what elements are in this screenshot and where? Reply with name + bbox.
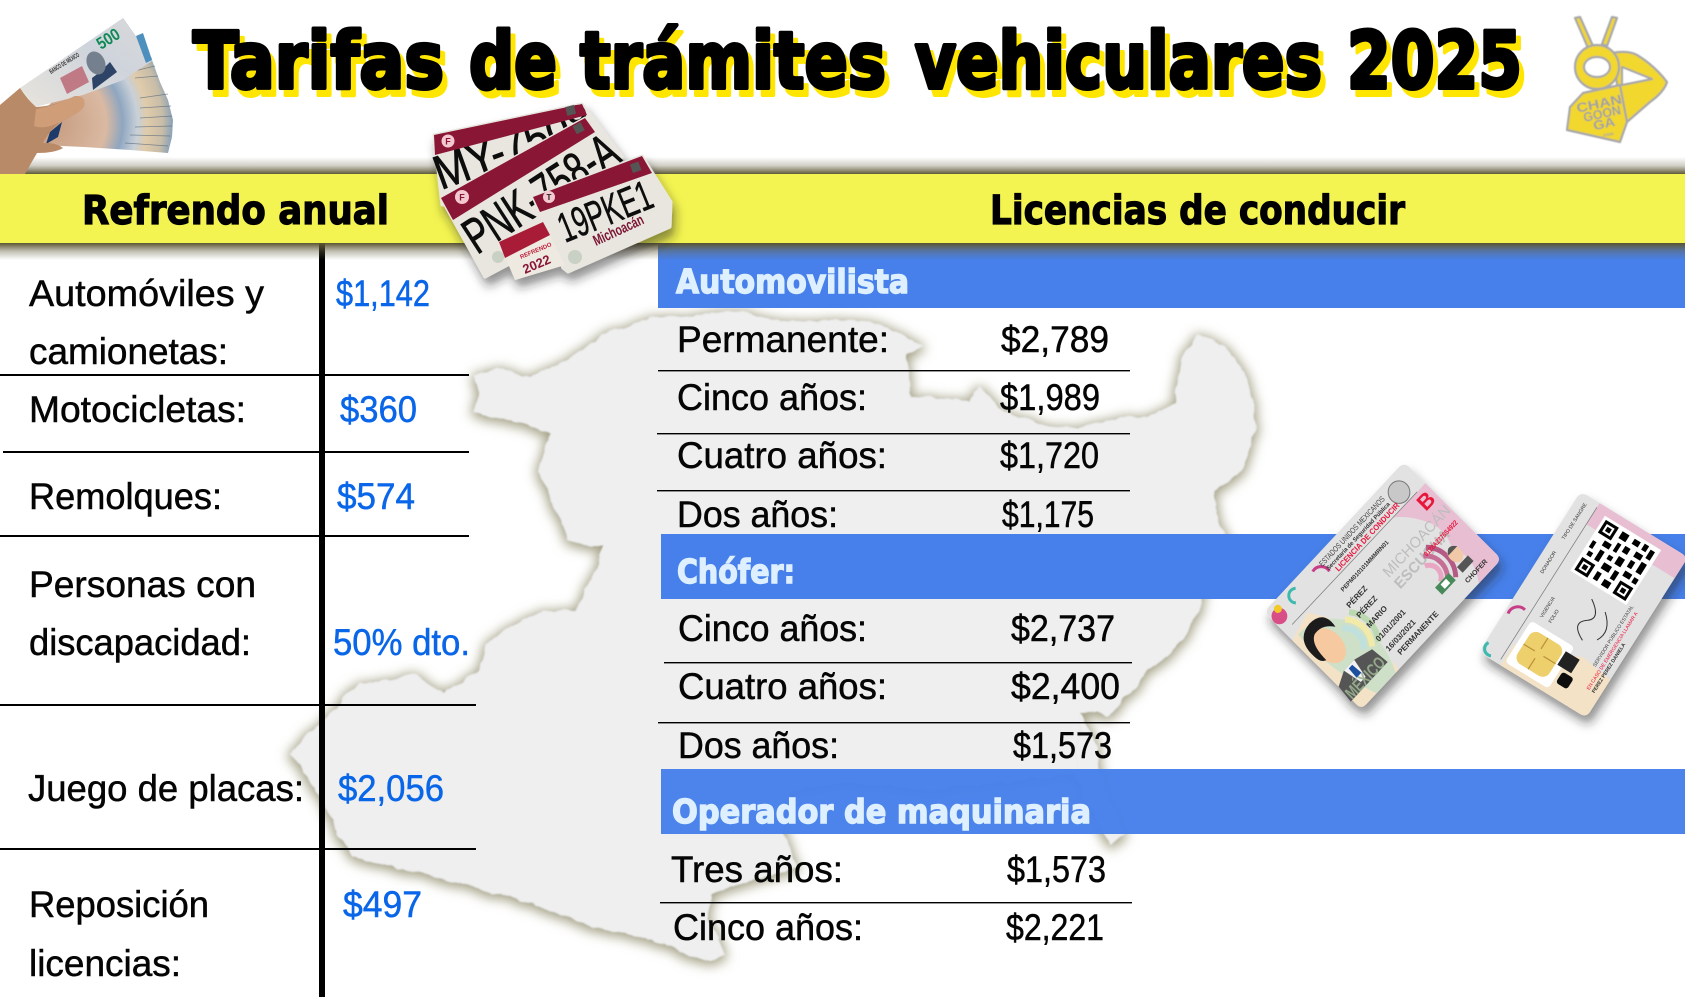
title xyxy=(193,17,1527,114)
title: vehiculares xyxy=(915,17,1322,107)
title: trámites xyxy=(585,24,891,114)
row: automóviles y camionetas xyxy=(29,272,430,372)
band: chófer: Chófer: xyxy=(677,552,795,591)
icon: driver licence back: PEREZ PEREZ DANIELA xyxy=(1591,642,1627,694)
row: cuatro años: $1,720 xyxy=(1000,434,1099,476)
row: reposición licencias: licencias: xyxy=(29,942,181,984)
icon: hand holding banknotes: 500 xyxy=(93,25,123,53)
title: de xyxy=(474,24,562,114)
row: dos años: Dos años: xyxy=(677,493,838,535)
header bar xyxy=(0,157,1685,260)
icon: driver licence front: 0128A2376S4922 xyxy=(1423,519,1460,558)
row: personas con discapacidad xyxy=(29,563,470,663)
smart chip xyxy=(1505,621,1574,689)
row: cinco años xyxy=(678,607,1115,649)
band: automovilista: Automovilista xyxy=(676,262,909,301)
title: 2025 xyxy=(1347,17,1522,107)
plate: PNK-758-A xyxy=(441,118,640,277)
icon: driver licence front: LICENCIA DE CONDUCIR xyxy=(1334,501,1402,573)
icon: driver licence back: SERVIDOR PÚBLICO ESTATAL xyxy=(1591,604,1636,668)
row: reposición licencias: $497 xyxy=(343,883,422,925)
sticker: refrendo 2022: REFRENDO xyxy=(519,242,553,261)
icon: driver licence front xyxy=(1263,462,1501,711)
sticker: refrendo 2022 xyxy=(499,222,565,280)
icon: driver licence front: MICHOACÁN xyxy=(1380,502,1454,581)
panel: automovilista xyxy=(657,243,1685,535)
row: cinco años: Cinco años: xyxy=(673,906,863,948)
row: motocicletas: $360 xyxy=(340,388,417,430)
row: dos años: $1,175 xyxy=(1002,493,1094,535)
background map of Michoacán xyxy=(289,312,1256,962)
row: automóviles y camionetas: $1,142 xyxy=(336,272,430,314)
panel: refrendo anual table xyxy=(0,243,476,997)
row: remolques: $574 xyxy=(337,475,415,517)
row: cuatro años: Cuatro años: xyxy=(677,434,887,476)
row: cinco años xyxy=(673,906,1104,948)
icon: changoonga logo: CHAN xyxy=(1575,91,1623,116)
icon: driver licence back: TIPO DE SANGRE xyxy=(1561,502,1589,541)
icon: driver licence front: PÉREZ xyxy=(1355,594,1379,620)
icon: changoonga logo: GA xyxy=(1592,114,1617,133)
plate: 19PKE1: 19PKE1 xyxy=(551,171,659,251)
row: juego de placas: Juego de placas: xyxy=(28,767,304,809)
band: automovilista xyxy=(658,243,1685,308)
row: dos años xyxy=(677,493,1094,535)
panel: operador de maquinaria xyxy=(660,769,1685,948)
row: dos años: $1,573 xyxy=(1013,724,1112,766)
row: juego de placas xyxy=(28,767,444,809)
row: permanente: Permanente: xyxy=(677,318,889,360)
icon: driver licence back: VIGENCIA xyxy=(1539,595,1557,619)
icon: driver licence back: DONADOR xyxy=(1539,550,1558,575)
qr code xyxy=(1570,516,1661,605)
row: cinco años: $2,737 xyxy=(1011,607,1115,649)
plate: MY-7508: F xyxy=(445,136,451,146)
icon: driver licence back xyxy=(1479,491,1685,718)
icon: hand holding banknotes: BANCO DE MÉXICO xyxy=(47,50,81,76)
band: operador de maquinaria: Operador de maquinaria xyxy=(672,792,1091,831)
row: tres años: $1,573 xyxy=(1007,848,1106,890)
icon: driver licence front: PÉREZ xyxy=(1345,584,1369,610)
row: cuatro años: Cuatro años: xyxy=(678,665,887,707)
title: 2025 xyxy=(1352,24,1527,114)
row: automóviles y camionetas: camionetas: xyxy=(29,330,228,372)
row: motocicletas: Motocicletas: xyxy=(29,388,246,430)
icon: driver licence front: MÉXICO xyxy=(1342,653,1389,703)
band: operador de maquinaria xyxy=(661,769,1685,834)
table dividers left xyxy=(0,243,476,997)
title: vehiculares xyxy=(920,24,1327,114)
sticker: refrendo 2022: 2022 xyxy=(520,252,553,277)
icon: hand holding banknotes xyxy=(0,18,173,174)
row: reposición licencias: Reposición xyxy=(29,883,209,925)
icon: driver licence front: 01/01/2001 xyxy=(1374,607,1408,643)
row: motocicletas xyxy=(29,388,417,430)
band: chófer xyxy=(661,534,1685,599)
row: juego de placas: $2,056 xyxy=(338,767,444,809)
icon: driver licence front: MARIO xyxy=(1365,604,1389,630)
row: cuatro años xyxy=(678,665,1120,707)
row: tres años xyxy=(671,848,1106,890)
row: reposición licencias xyxy=(29,883,422,984)
row: remolques: Remolques: xyxy=(29,475,222,517)
icon: driver licence front: ESCUCHA xyxy=(1391,526,1454,592)
icon: driver licence front: PEPM010101MMMRN01 xyxy=(1340,539,1391,593)
plate: 19PKE1: T xyxy=(547,193,552,202)
row: dos años: Dos años: xyxy=(678,724,839,766)
title: trámites xyxy=(580,17,886,107)
icon: driver licence back: FOLIO xyxy=(1548,609,1561,625)
icon: driver licence front: PERMANENTE xyxy=(1396,609,1441,657)
plate: 19PKE1: Michoacán xyxy=(591,211,647,250)
icon: driver licence front: B xyxy=(1412,486,1440,515)
title: Tarifas xyxy=(198,24,449,114)
plate: MY-7508: MY-7508 xyxy=(427,94,600,200)
icon: driver licence front: ESTADOS UNIDOS MEXICANOS xyxy=(1317,495,1387,568)
icon: license plates xyxy=(427,94,671,280)
icon: driver licence back: EN CASO DE EMERGENCIA LLAMAR A xyxy=(1586,611,1640,691)
row: cinco años xyxy=(677,376,1100,418)
row: permanente xyxy=(677,318,1109,360)
row: remolques xyxy=(29,475,415,517)
icon: driver licence front: CHOFER xyxy=(1464,558,1489,585)
heading: licencias de conducir: Licencias de conducir xyxy=(990,188,1405,234)
title: Tarifas xyxy=(193,17,444,107)
row: personas con discapacidad: 50% dto. xyxy=(333,621,470,663)
row: cinco años: $2,221 xyxy=(1006,906,1104,948)
icon: changoonga logo: GOON xyxy=(1582,102,1622,125)
row: cuatro años xyxy=(677,434,1099,476)
icon: driver licence front: 16/03/2021 xyxy=(1384,617,1418,653)
row: cinco años: Cinco años: xyxy=(677,376,867,418)
row: personas con discapacidad: Personas con xyxy=(29,563,256,605)
plate: PNK-758-A: PNK-758-A xyxy=(452,122,629,264)
row: cinco años: $1,989 xyxy=(1000,376,1100,418)
row: cuatro años: $2,400 xyxy=(1011,665,1120,707)
title: de xyxy=(469,17,557,107)
row: permanente: $2,789 xyxy=(1001,318,1109,360)
icon: changoonga logo xyxy=(1567,17,1667,142)
plate: 19PKE1 xyxy=(533,156,671,272)
row: cinco años: Cinco años: xyxy=(678,607,867,649)
icon: changoonga logo: .com xyxy=(1602,131,1615,139)
panel: chófer xyxy=(658,534,1685,766)
heading: refrendo anual: Refrendo anual xyxy=(82,188,389,234)
row: dos años xyxy=(678,724,1112,766)
row: tres años: Tres años: xyxy=(671,848,843,890)
icon: driver licence front: Secretaría de Seguridad Pública xyxy=(1326,501,1392,572)
row: personas con discapacidad: discapacidad: xyxy=(29,621,251,663)
plate: PNK-758-A: F xyxy=(459,192,465,202)
row: automóviles y camionetas: Automóviles y xyxy=(29,272,264,314)
